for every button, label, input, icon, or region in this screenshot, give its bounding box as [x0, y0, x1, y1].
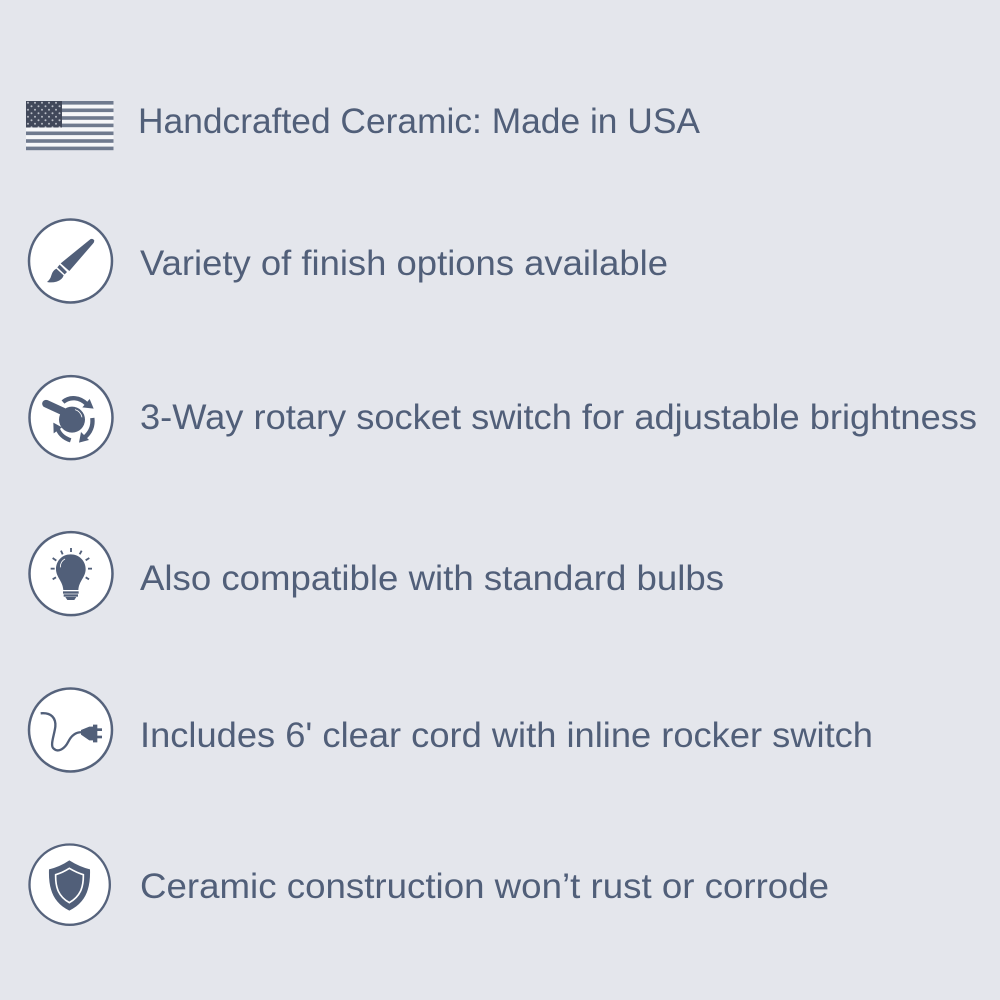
icon: paint brush [29, 219, 112, 302]
icon: shield [29, 844, 110, 925]
icon: american flag [26, 101, 114, 150]
text: clear cord: Includes 6' clear cord with inline rocker switch [140, 715, 873, 755]
text: rotary switch: 3-Way rotary socket switch for adjustable brightness [140, 397, 977, 437]
text: finish options: Variety of finish options available [140, 243, 668, 283]
icon: power cord [29, 688, 112, 771]
text: rust and corrosion: Ceramic construction won’t rust or corrode [140, 866, 829, 906]
text: standard bulbs: Also compatible with standard bulbs [140, 558, 724, 598]
heading: made in usa: Handcrafted Ceramic: Made in USA [138, 101, 700, 141]
icon: light bulb [29, 532, 112, 615]
icon: rotary switch [29, 376, 112, 459]
